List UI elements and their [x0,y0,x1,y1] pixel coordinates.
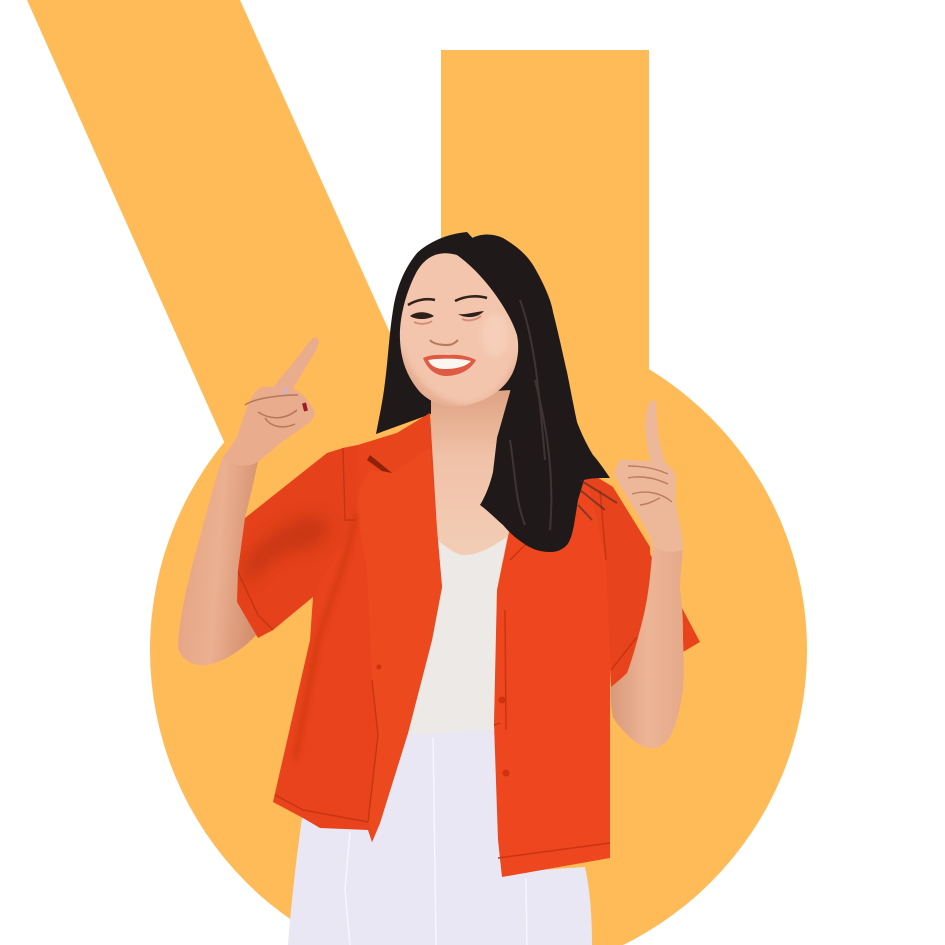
left jacket body [273,413,442,842]
lapel [357,447,442,842]
hand [615,400,683,552]
nose [430,340,458,345]
sleeve shadow [237,516,328,630]
eyes [410,312,434,319]
right shoulder [580,467,652,687]
white top [407,537,507,737]
eye shadow [414,316,481,324]
dark body fold [295,513,357,760]
right jacket panel [494,467,613,877]
collar [358,413,430,473]
left sleeve [237,445,358,638]
pants [288,730,592,945]
hem stitch [275,448,378,822]
ring [282,388,288,394]
arm [611,545,684,748]
neck and chest [431,390,512,560]
strands over shoulder [578,480,617,520]
mouth [423,355,476,376]
jacket [178,413,700,877]
cheek shading [401,314,517,406]
left arm [178,457,262,665]
right sleeve cuff [611,490,700,687]
hair back [376,232,530,470]
nail polish [304,403,306,411]
face [400,253,518,420]
panel details [494,490,637,858]
right arm and hand pointing [611,400,684,748]
face shape [400,253,518,406]
collar notch [367,455,392,473]
eyebrows [408,296,487,305]
jacket buttons [376,664,510,776]
hair front locks [457,235,617,552]
left hand pointing [223,337,319,465]
teeth [428,359,471,369]
